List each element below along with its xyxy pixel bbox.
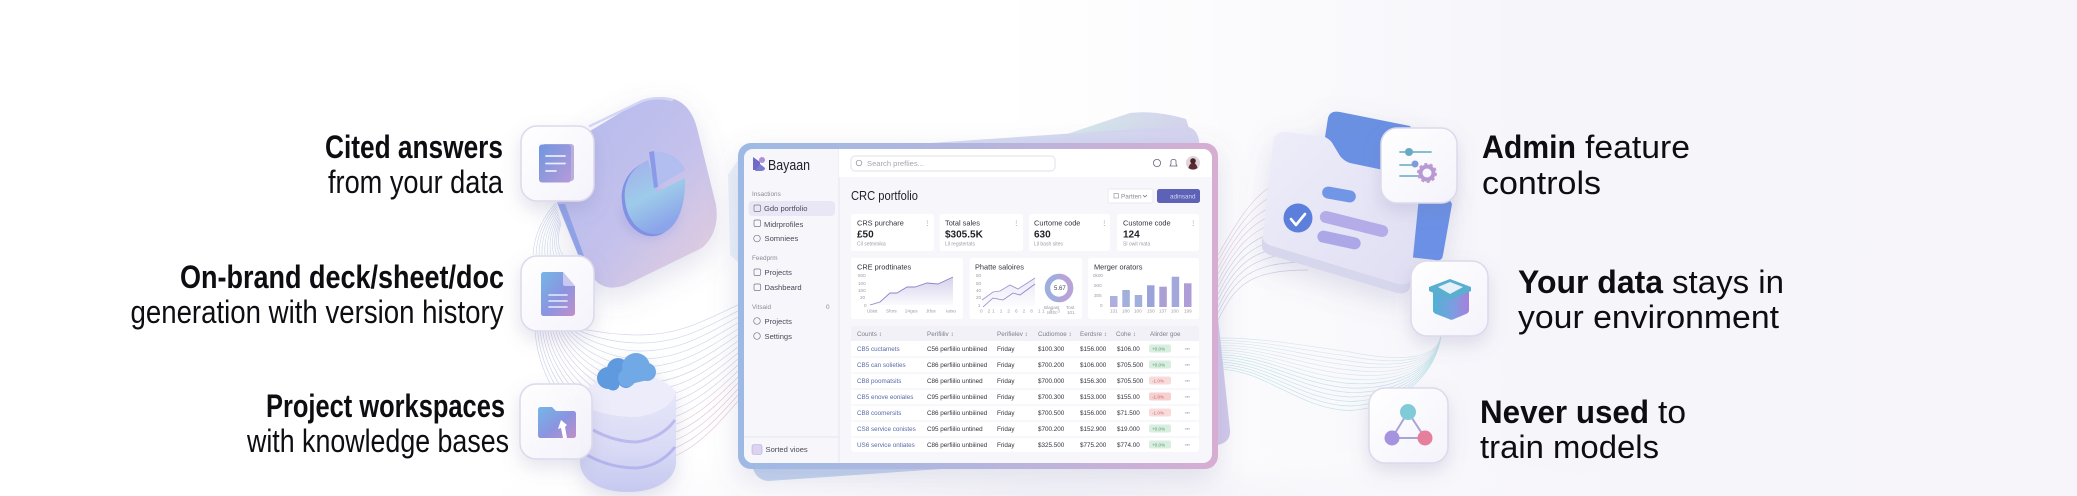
bar chart bbox=[1088, 258, 1199, 319]
text: on-brand generation: On-brand deck/sheet/doc bbox=[180, 259, 504, 295]
table row 7 bbox=[857, 440, 1190, 449]
table row 5 bbox=[857, 408, 1190, 417]
table row 2: Friday bbox=[997, 362, 1015, 369]
table row 4: Friday bbox=[997, 394, 1015, 401]
table row 6: C95 perfiilio untined bbox=[927, 426, 983, 433]
KPI cards: ⋮ bbox=[1101, 220, 1107, 227]
line and donut chart: 0 21 1 2 6 2 8 11 6 3 bbox=[980, 308, 1062, 314]
text: never used: Never used bbox=[1480, 394, 1649, 430]
bar chart: 199 bbox=[1184, 308, 1192, 314]
text: on-brand generation bbox=[130, 259, 504, 330]
KPI cards: CRS purchare bbox=[857, 218, 904, 228]
table row 1: CB5 cuctamets bbox=[857, 346, 900, 353]
table row 4: ••• bbox=[1185, 394, 1190, 400]
bar chart: 180 bbox=[1122, 308, 1130, 314]
text: admin feature controls: controls bbox=[1482, 165, 1601, 201]
table header bbox=[857, 331, 1181, 338]
icon: 3D folder with checklist bbox=[1262, 112, 1452, 293]
table row 5: $156.000 bbox=[1080, 410, 1107, 417]
icon card: project workspaces folder bbox=[520, 384, 592, 459]
KPI cards: ⋮ bbox=[924, 220, 930, 227]
line and donut chart bbox=[970, 258, 1082, 319]
table row 7: ••• bbox=[1185, 442, 1190, 448]
text: your data stays: your environment bbox=[1518, 299, 1779, 335]
back sheets behind the dashboard bbox=[728, 112, 1230, 481]
table row 3: C86 perfiilio untined bbox=[927, 378, 983, 385]
table row 7: +0.0% bbox=[1152, 442, 1165, 448]
table row 6: CS8 service conistes bbox=[857, 426, 916, 433]
text: admin feature controls bbox=[1482, 129, 1690, 201]
data table bbox=[851, 326, 1199, 452]
action buttons: adinsand bbox=[1170, 194, 1196, 200]
bar chart: 100 bbox=[1134, 308, 1142, 314]
sidebar: Somniees bbox=[764, 234, 798, 243]
table row 2: CB5 can solieties bbox=[857, 362, 906, 369]
KPI cards: $305.5K bbox=[945, 230, 984, 240]
list bars bbox=[1316, 186, 1389, 250]
left glow sheet bbox=[728, 160, 738, 262]
bar chart: 0k00 bbox=[1093, 273, 1103, 278]
sidebar: Sorted vioes bbox=[766, 445, 808, 454]
bar chart: 131 bbox=[1110, 308, 1118, 314]
text: admin feature controls: Admin bbox=[1482, 129, 1576, 165]
table row 6: $19.000 bbox=[1117, 426, 1140, 433]
check badge bbox=[1284, 204, 1312, 232]
sidebar: Settings bbox=[764, 332, 792, 341]
bar chart: 150 bbox=[1147, 308, 1155, 314]
table header: Counts ↕ bbox=[857, 331, 882, 338]
line and donut chart: 50 bbox=[976, 281, 982, 286]
table row 3: CB8 poomatsits bbox=[857, 378, 901, 385]
top bar bbox=[839, 149, 1212, 177]
bar chart: 0 bbox=[1100, 303, 1103, 308]
table row 4: C95 perfiilio unbiiined bbox=[927, 394, 988, 401]
table row 7: $774.00 bbox=[1117, 442, 1140, 449]
blue lower sheet bbox=[752, 466, 985, 481]
icon card: data environment box bbox=[1411, 261, 1488, 336]
table row 5: $71.500 bbox=[1117, 410, 1140, 417]
KPI cards: ⋮ bbox=[1190, 220, 1196, 227]
line and donut chart: 20 bbox=[976, 295, 982, 300]
table row 5: ••• bbox=[1185, 410, 1190, 416]
line and donut chart: 5.67 bbox=[1054, 286, 1066, 292]
flowing wave lines, left bbox=[533, 203, 738, 463]
table row 3: $705.500 bbox=[1117, 378, 1144, 385]
area chart: Iatso bbox=[946, 308, 956, 314]
KPI cards: £50 bbox=[857, 230, 874, 240]
text: never used bbox=[1480, 394, 1686, 465]
table row 5: CB8 coomersits bbox=[857, 410, 901, 417]
area chart: 100 bbox=[858, 288, 866, 293]
text: admin feature controls: feature bbox=[1585, 129, 1690, 165]
sidebar: 0 bbox=[826, 304, 830, 311]
text: cited answers: from your data bbox=[328, 164, 503, 200]
sidebar: Projects bbox=[764, 268, 792, 277]
icon card: cited answers document bbox=[521, 126, 594, 201]
table row 1: $100.300 bbox=[1038, 346, 1065, 353]
area chart: 20 bbox=[860, 295, 866, 300]
logo bbox=[753, 157, 810, 174]
KPI cards: Curtome code bbox=[1034, 218, 1080, 228]
table row 7: Friday bbox=[997, 442, 1015, 449]
table row 3: $156.300 bbox=[1080, 378, 1107, 385]
line and donut chart: 50 bbox=[976, 273, 982, 278]
table row 4: CB5 enove eoniales bbox=[857, 394, 913, 401]
line and donut chart: Blagast bbox=[1044, 305, 1060, 310]
KPI cards: ⋮ bbox=[1013, 220, 1019, 227]
sidebar bbox=[744, 149, 839, 463]
KPI cards: 630 bbox=[1034, 230, 1051, 240]
area chart: Ubist bbox=[867, 308, 878, 314]
lavender back sheet bbox=[930, 126, 1230, 445]
text: project workspaces: Project workspaces bbox=[266, 388, 505, 424]
table row 2: $106.000 bbox=[1080, 362, 1107, 369]
area chart: 0 bbox=[864, 303, 867, 308]
KPI cards: Cil setmmika bbox=[857, 242, 886, 248]
KPI cards: Sl owit mata bbox=[1123, 242, 1150, 248]
sidebar: Insactions bbox=[752, 191, 781, 198]
table row 1: $106.00 bbox=[1117, 346, 1140, 353]
KPI cards bbox=[851, 214, 1199, 251]
table row 2: $705.500 bbox=[1117, 362, 1144, 369]
table row 3: -1.0% bbox=[1152, 378, 1164, 384]
pie bbox=[622, 151, 685, 238]
logo: Bayaan bbox=[768, 158, 810, 174]
cloud bbox=[597, 353, 656, 390]
icon card: admin controls bbox=[1381, 128, 1457, 203]
table row 1: +0.0% bbox=[1152, 346, 1165, 352]
table row 4: $155.00 bbox=[1117, 394, 1140, 401]
table row 7: US6 service ontiates bbox=[857, 442, 915, 449]
text: your data stays: Your data bbox=[1518, 264, 1663, 300]
table row 4: $700.300 bbox=[1038, 394, 1065, 401]
text: on-brand generation: generation with version history bbox=[130, 294, 504, 330]
table row 4: $153.000 bbox=[1080, 394, 1107, 401]
KPI cards: Lil regstertats bbox=[945, 242, 976, 248]
action buttons: Partten bbox=[1121, 194, 1142, 200]
table header: Perifiiliv ↕ bbox=[927, 331, 954, 338]
sidebar: Midrprofiles bbox=[764, 220, 803, 229]
table row 5: Friday bbox=[997, 410, 1015, 417]
area chart: 500 bbox=[858, 273, 866, 278]
area chart: 100 bbox=[858, 281, 866, 286]
table header: Cudiomoe ↕ bbox=[1038, 331, 1072, 338]
bar chart: 137 bbox=[1159, 308, 1167, 314]
table row 6: $700.200 bbox=[1038, 426, 1065, 433]
area chart bbox=[851, 258, 963, 319]
table header: Cohe ↕ bbox=[1116, 331, 1136, 338]
table row 1: Friday bbox=[997, 346, 1015, 353]
table row 1: ••• bbox=[1185, 346, 1190, 352]
text: cited answers: Cited answers bbox=[325, 129, 503, 165]
table row 6: $152.900 bbox=[1080, 426, 1107, 433]
icon: database with cloud bbox=[580, 353, 676, 492]
table row 5: -1.0% bbox=[1152, 410, 1164, 416]
KPI cards: Custome code bbox=[1123, 218, 1171, 228]
table row 2: C86 perfiilio unbiiined bbox=[927, 362, 988, 369]
table row 3: $700.000 bbox=[1038, 378, 1065, 385]
table row 6 bbox=[857, 424, 1190, 433]
area chart: 24ges bbox=[905, 308, 918, 314]
table row 3 bbox=[857, 376, 1190, 385]
icon: 3D pie chart tile bbox=[557, 97, 717, 288]
table row 1 bbox=[857, 344, 1190, 353]
bar chart: 500 bbox=[1094, 283, 1102, 288]
table row 2: +0.0% bbox=[1152, 362, 1165, 368]
table row 2: ••• bbox=[1185, 362, 1190, 368]
table row 3: ••• bbox=[1185, 378, 1190, 384]
KPI cards: 124 bbox=[1123, 230, 1140, 240]
table row 5: $700.500 bbox=[1038, 410, 1065, 417]
icon card: on-brand document bbox=[521, 256, 594, 331]
text: never used: to bbox=[1658, 394, 1686, 430]
KPI cards: Total sales bbox=[945, 218, 980, 228]
table header: Alirder goe bbox=[1150, 331, 1181, 338]
text: cited answers bbox=[325, 129, 503, 200]
table row 7: $775.200 bbox=[1080, 442, 1107, 449]
top bar: Search preflies... bbox=[867, 159, 924, 168]
sidebar: Dashbeard bbox=[764, 283, 802, 292]
line and donut chart: 40 bbox=[976, 288, 982, 293]
sidebar: Vitsaid bbox=[752, 304, 772, 311]
table row 4: -1.8% bbox=[1152, 394, 1164, 400]
line and donut chart: Phatte saloires bbox=[975, 262, 1024, 272]
area chart: Sfors bbox=[886, 308, 897, 314]
action buttons bbox=[1108, 189, 1200, 203]
line and donut chart: Tost bbox=[1066, 305, 1075, 310]
table row 6: ••• bbox=[1185, 426, 1190, 432]
text: project workspaces bbox=[246, 388, 509, 459]
text: your data stays: stays in bbox=[1672, 264, 1784, 300]
line and donut chart: 1 bbox=[978, 303, 981, 308]
text: project workspaces: with knowledge bases bbox=[246, 423, 509, 459]
KPI cards: Lil bash sites bbox=[1034, 242, 1063, 248]
area chart: CRE prodtinates bbox=[857, 262, 912, 272]
text: your data stays bbox=[1518, 264, 1784, 335]
table row 7: C86 perfiilio unbiiined bbox=[927, 442, 988, 449]
sidebar: Projects bbox=[764, 317, 792, 326]
table header: Eerdsre ↕ bbox=[1080, 331, 1107, 338]
table row 3: Friday bbox=[997, 378, 1015, 385]
sidebar: Gdo portfolio bbox=[764, 204, 807, 213]
table row 6: +0.0% bbox=[1152, 426, 1165, 432]
teal back sheet bbox=[1040, 112, 1196, 150]
bar chart: 100 bbox=[1171, 308, 1179, 314]
table row 1: $156.000 bbox=[1080, 346, 1107, 353]
table row 1: C56 perfiilio unbiiined bbox=[927, 346, 988, 353]
icon card: never used to train models bbox=[1369, 388, 1448, 463]
area chart: Jtfos bbox=[926, 308, 936, 314]
line and donut chart: 101 bbox=[1067, 310, 1075, 315]
table row 6: Friday bbox=[997, 426, 1015, 433]
table header: Perifielev ↕ bbox=[997, 331, 1028, 338]
bar chart: Merger orators bbox=[1094, 262, 1143, 272]
dashboard tablet bbox=[738, 143, 1218, 469]
bar chart: 305 bbox=[1094, 293, 1102, 298]
table row 2: $700.200 bbox=[1038, 362, 1065, 369]
table row 2 bbox=[857, 360, 1190, 369]
table row 7: $325.500 bbox=[1038, 442, 1065, 449]
flowing wave lines, right bbox=[1218, 187, 1441, 410]
table row 4 bbox=[857, 392, 1190, 401]
table row 5: C86 perfiilio unbiiined bbox=[927, 410, 988, 417]
sidebar: Feedprm bbox=[752, 255, 778, 262]
line and donut chart: Ischt bbox=[1047, 310, 1057, 315]
page title: CRC portfolio bbox=[851, 188, 918, 203]
text: never used: train models bbox=[1480, 429, 1659, 465]
